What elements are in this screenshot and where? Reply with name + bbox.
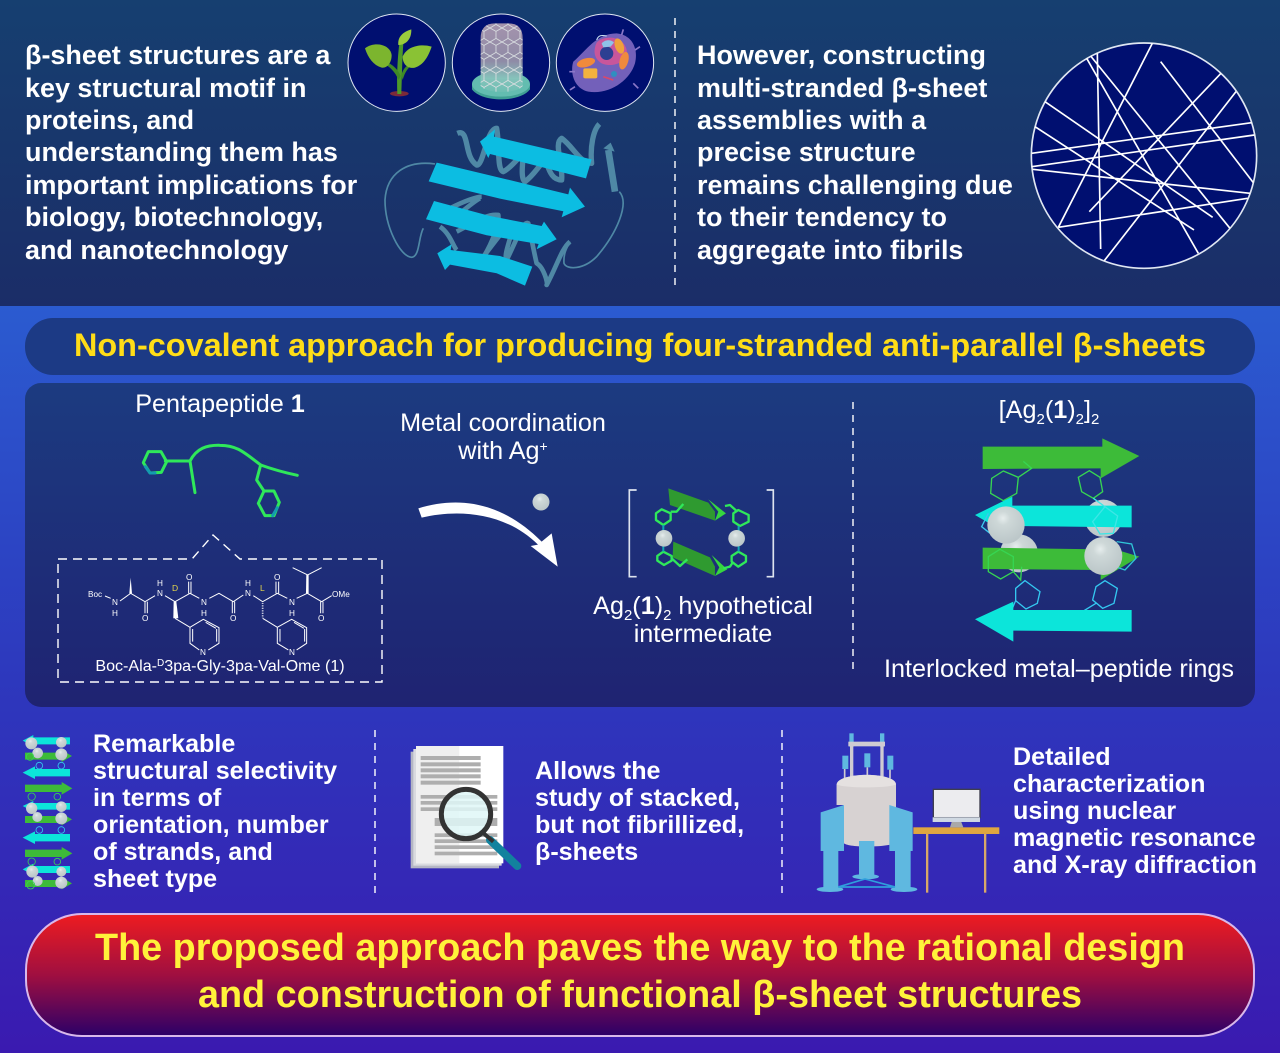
label: compound name: D: [157, 658, 164, 669]
illustration: protein ribbon with beta strands: [385, 124, 623, 286]
chemical structure: Boc-Ala-D3pa-Gly-3pa-Val-OMe: H: [112, 609, 118, 618]
chemical structure: Boc-Ala-D3pa-Gly-3pa-Val-OMe: L: [260, 583, 265, 593]
strand 1: [480, 129, 592, 178]
text block: challenge of constructing assemblies: assemblies with a: [697, 105, 927, 135]
label: complex formula: [Ag: [999, 396, 1036, 424]
background: top band: [0, 0, 1280, 306]
chemical structure: Boc-Ala-D3pa-Gly-3pa-Val-OMe: N: [157, 589, 163, 598]
text block: characterization: and X-ray diffraction: [1013, 851, 1257, 879]
chemical structure: Boc-Ala-D3pa-Gly-3pa-Val-OMe: H: [289, 609, 295, 618]
icon: NMR spectrometer with computer desk: [817, 733, 999, 893]
text block: challenge of constructing assemblies: to their tendency to: [697, 202, 947, 232]
text block: challenge of constructing assemblies: multi-stranded β-sheet: [697, 73, 987, 103]
text block: characterization: characterization: [1013, 770, 1205, 798]
strand 3: [426, 201, 557, 249]
text block: structural selectivity: Remarkable: [93, 730, 235, 758]
chemical structure: Boc-Ala-D3pa-Gly-3pa-Val-OMe: [88, 568, 350, 657]
label: compound name: 3pa-Gly-3pa-Val-Ome (1): [164, 657, 345, 675]
chemical structure: Boc-Ala-D3pa-Gly-3pa-Val-OMe: O: [318, 614, 324, 623]
text block: beta-sheet importance: biology, biotechnology,: [25, 202, 323, 232]
illustration: interlocked rings four-stranded sheet: [975, 438, 1139, 642]
text block: characterization: using nuclear: [1013, 797, 1176, 825]
label: intermediate: intermediate: [634, 620, 772, 648]
chemical structure: Boc-Ala-D3pa-Gly-3pa-Val-OMe: N: [201, 598, 207, 607]
label: interlocked rings: Interlocked metal–peptide rings: [884, 655, 1234, 683]
heading pill: approach title: Non-covalent approach for producing four-stranded anti-parallel β-sheets: [74, 327, 1206, 363]
text block: beta-sheet importance: key structural motif in: [25, 73, 306, 103]
icon: green peptide skeleton: [143, 445, 297, 516]
chemical structure: Boc-Ala-D3pa-Gly-3pa-Val-OMe: H: [157, 579, 163, 588]
text block: challenge of constructing assemblies: precise structure: [697, 137, 916, 167]
label: intermediate: 1): [641, 592, 663, 620]
text block: structural selectivity: in terms of: [93, 784, 222, 812]
label: complex formula: 1): [1053, 396, 1076, 424]
chemical structure: Boc-Ala-D3pa-Gly-3pa-Val-OMe: N: [289, 598, 295, 607]
chemical structure: Boc-Ala-D3pa-Gly-3pa-Val-OMe: D: [172, 583, 178, 593]
label: compound name: Boc-Ala-: [95, 657, 157, 675]
icon: plant in circle: [348, 14, 445, 111]
text block: beta-sheet importance: important implications for: [25, 170, 358, 200]
text block: challenge of constructing assemblies: aggregate into fibrils: [697, 235, 963, 265]
text block: beta-sheet importance: β-sheet structures are a: [25, 40, 331, 70]
icon: silver ion: [532, 494, 550, 510]
label: intermediate: 2: [624, 607, 632, 624]
chemical structure: Boc-Ala-D3pa-Gly-3pa-Val-OMe: O: [274, 573, 280, 582]
label: intermediate: Ag: [593, 592, 813, 624]
chemical structure: Boc-Ala-D3pa-Gly-3pa-Val-OMe: OMe: [332, 590, 350, 599]
text block: challenge of constructing assemblies: However, constructing: [697, 40, 986, 70]
dashed callout: structure box: [58, 535, 382, 682]
chemical structure: Boc-Ala-D3pa-Gly-3pa-Val-OMe: O: [230, 614, 236, 623]
label: complex formula: (: [1045, 396, 1054, 424]
text block: characterization: Detailed: [1013, 743, 1111, 771]
label: metal coordination: with Ag: [457, 437, 548, 465]
label: complex formula: 2: [1091, 411, 1099, 428]
icon: nanotube in circle: [452, 14, 550, 111]
strand 4: [437, 244, 532, 286]
chemical structure: Boc-Ala-D3pa-Gly-3pa-Val-OMe: O: [186, 573, 192, 582]
helices and loops: [385, 124, 623, 285]
icon: document with magnifying glass: [411, 746, 517, 868]
label: complex formula: 2: [1076, 411, 1084, 428]
icon: stacks of beta-sheet arrows: [23, 735, 72, 889]
chemical structure: Boc-Ala-D3pa-Gly-3pa-Val-OMe: N: [245, 589, 251, 598]
text block: structural selectivity: of strands, and: [93, 838, 273, 866]
label: metal coordination: +: [540, 438, 548, 454]
conclusion pill: and construction of functional β-sheet structures: [198, 974, 1082, 1016]
label: intermediate: 2: [663, 607, 671, 624]
label: intermediate: hypothetical: [671, 592, 813, 620]
chemical structure: Boc-Ala-D3pa-Gly-3pa-Val-OMe: H: [245, 579, 251, 588]
chemical structure: Boc-Ala-D3pa-Gly-3pa-Val-OMe: Boc: [88, 590, 102, 599]
text block: beta-sheet importance: proteins, and: [25, 105, 194, 135]
label: metal coordination: Metal coordination: [400, 409, 606, 437]
chemical structure: Boc-Ala-D3pa-Gly-3pa-Val-OMe: N: [200, 648, 206, 657]
chemical structure: Boc-Ala-D3pa-Gly-3pa-Val-OMe: O: [142, 614, 148, 623]
divider: top band: [674, 18, 676, 288]
chemical structure: Boc-Ala-D3pa-Gly-3pa-Val-OMe: N: [289, 648, 295, 657]
text block: characterization: magnetic resonance: [1013, 824, 1256, 852]
divider: bottom right: [781, 730, 783, 893]
text block: beta-sheet importance: understanding them has: [25, 137, 338, 167]
text block: challenge of constructing assemblies: remains challenging due: [697, 170, 1013, 200]
panel: molecular assembly: [25, 383, 1255, 707]
text block: beta-sheet importance: and nanotechnology: [25, 235, 288, 265]
chemical structure: Boc-Ala-D3pa-Gly-3pa-Val-OMe: N: [112, 598, 118, 607]
text block: structural selectivity: orientation, number: [93, 811, 329, 839]
label: complex formula: ]: [1084, 396, 1091, 424]
label: intermediate: (: [632, 592, 641, 620]
divider: panel: [852, 402, 854, 670]
chemical structure: Boc-Ala-D3pa-Gly-3pa-Val-OMe: H: [201, 609, 207, 618]
text block: stacked study: β-sheets: [535, 838, 638, 866]
icon: animal cell in circle: [556, 14, 654, 111]
conclusion pill: The proposed approach paves the way to the rational design: [95, 927, 1185, 969]
text block: stacked study: but not fibrillized,: [535, 811, 744, 839]
divider: bottom left: [374, 730, 376, 893]
text block: structural selectivity: sheet type: [93, 865, 217, 893]
conclusion pill: [26, 914, 1254, 1036]
text block: stacked study: study of stacked,: [535, 784, 740, 812]
text block: stacked study: Allows the: [535, 757, 661, 785]
icon: hypothetical intermediate in brackets: [629, 488, 773, 577]
label: complex formula: 2: [1036, 411, 1045, 428]
background: lower section: [0, 306, 1280, 1053]
text block: structural selectivity: structural selectivity: [93, 757, 337, 785]
icon: fibril network circle: [1031, 43, 1257, 268]
heading pill: approach title: [25, 318, 1255, 375]
strand 2: [429, 163, 585, 217]
label: Pentapeptide 1: Pentapeptide 1: [135, 390, 305, 418]
arrow: coordination step: [418, 502, 558, 567]
